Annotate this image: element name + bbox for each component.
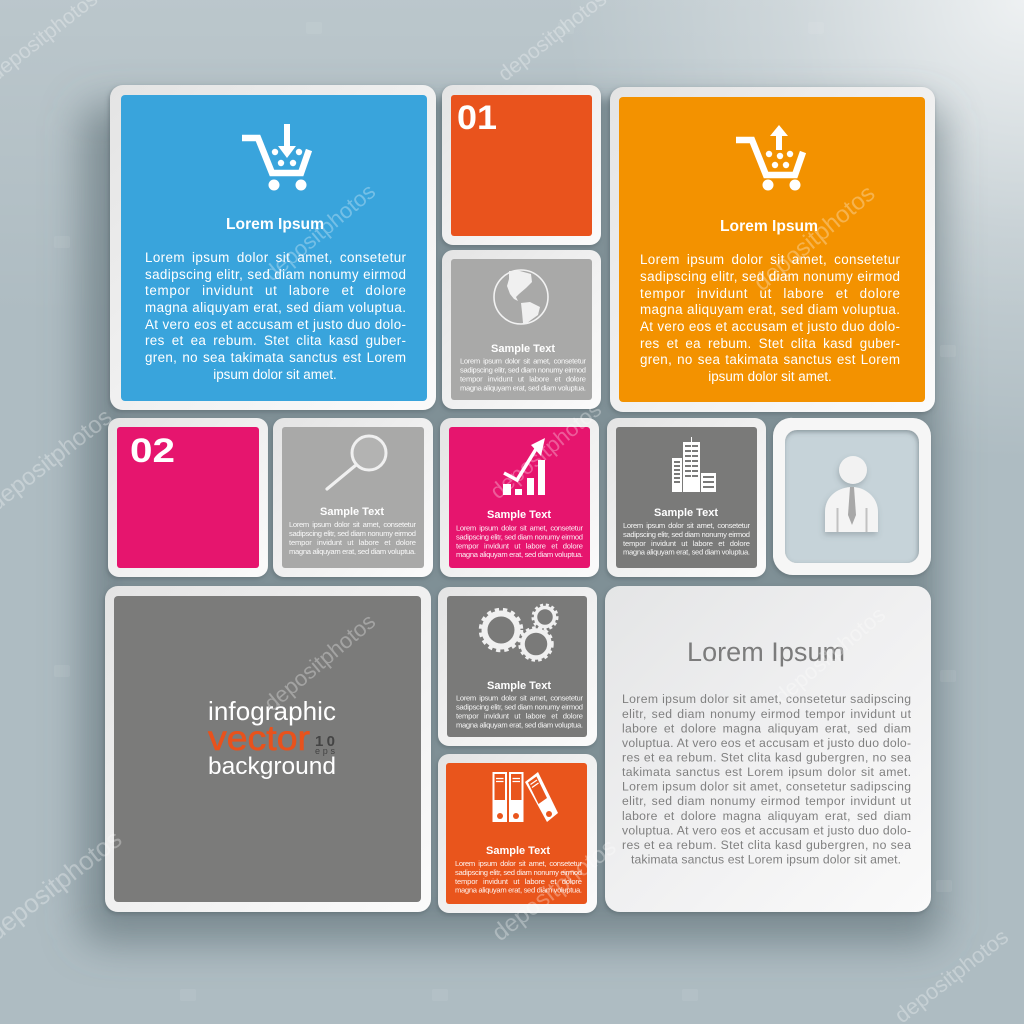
body text: At vero eos et accusam et justo duo dolo- [640, 319, 900, 334]
icon: gears [481, 605, 557, 660]
body text [623, 521, 750, 556]
watermarks: depositphotos [485, 397, 606, 504]
title lockup [208, 696, 336, 780]
icon: binders [492, 772, 558, 822]
body text: sadipscing elitr, sed diam nonumy eirmod [455, 868, 582, 877]
number 01: 01 [457, 99, 497, 137]
title lockup: background [208, 753, 336, 780]
panel: blue cart [110, 85, 436, 410]
body text: labore et dolore magna aliquyam erat, sed diam [622, 809, 911, 823]
body text: labore et dolore magna aliquyam erat, sed diam [622, 722, 911, 736]
panel: 02 [108, 418, 268, 577]
icon: cart with down arrow [242, 124, 309, 190]
panel: white text [605, 586, 931, 912]
panel: 01 [442, 85, 601, 245]
body text: voluptua. At vero eos et accusam et justo duo dolo- [622, 824, 911, 838]
body text: sadipscing elitr, sed diam nonumy eirmod [456, 532, 583, 542]
body text: tempor invidunt ut labore et dolore [289, 538, 416, 547]
body text: sadipscing elitr, sed diam nonumy eirmod [145, 267, 406, 282]
body text [456, 694, 583, 730]
title lockup: eps [315, 746, 336, 756]
body text: Lorem ipsum dolor sit amet, consetetur [640, 252, 901, 267]
body text: voluptua. At vero eos et accusam et justo duo dolo- [622, 736, 911, 750]
body text: tempor invidunt ut labore et dolore [456, 542, 583, 550]
body text: takimata sanctus est Lorem ipsum dolor sit amet. [631, 852, 901, 866]
body text [145, 250, 407, 382]
title lockup: 10 [315, 733, 335, 750]
body text: sadipscing elitr, sed diam nonumy eirmod [640, 269, 900, 284]
title lockup: infographic [208, 696, 336, 726]
body text: Lorem ipsum dolor sit amet, consetetur [456, 524, 583, 532]
body text: sadipscing elitr, sed diam nonumy eirmod [623, 530, 750, 539]
body text: Lorem ipsum dolor sit amet, consetetur [456, 694, 583, 702]
body text: tempor invidunt ut labore et dolore [456, 712, 583, 720]
panel: binders [438, 754, 597, 913]
icon: rising bar chart [503, 438, 545, 495]
body text: ipsum dolor sit amet. [708, 369, 832, 384]
heading: Sample Text [487, 509, 551, 521]
panel: person frame [773, 418, 931, 575]
body text: elitr, sed diam nonumy eirmod tempor invidunt ut [622, 707, 912, 721]
panel: growth chart [440, 418, 599, 577]
body text: magna aliquyam erat, sed diam voluptua. [455, 886, 582, 894]
body text: magna aliquyam erat, sed diam voluptua. [460, 384, 586, 392]
panel: gears [438, 587, 597, 746]
number 02: 02 [130, 432, 175, 470]
heading: Lorem Ipsum [226, 216, 324, 233]
icon: buildings [672, 437, 716, 492]
body text: tempor invidunt ut labore et dolore [460, 374, 586, 384]
body text: magna aliquyam erat, sed diam voluptua. [289, 547, 416, 556]
body text: tempor invidunt ut labore et dolore [145, 283, 406, 298]
body text: magna aliquyam erat, sed diam voluptua. [456, 550, 583, 559]
body text: gren, no sea takimata sanctus est Lorem [640, 352, 900, 367]
body text: takimata sanctus est Lorem ipsum dolor sit amet. [622, 765, 911, 779]
body text [289, 520, 416, 556]
body text: res et ea rebum. Stet clita kasd gubergren, no sea [622, 750, 911, 764]
body text: Lorem ipsum dolor sit amet, consetetur sadipscing [622, 780, 911, 794]
body text [455, 859, 582, 894]
body text: ipsum dolor sit amet. [213, 367, 337, 382]
body text: magna aliquyam erat, sed diam voluptua. [145, 300, 406, 315]
panel: orange cart [610, 87, 935, 412]
panel: buildings [607, 418, 766, 577]
body text: Lorem ipsum dolor sit amet, consetetur [289, 520, 416, 529]
icon: person with tie [825, 456, 878, 532]
body text: res et ea rebum. Stet clita kasd guber- [640, 336, 900, 351]
heading: Sample Text [320, 506, 384, 518]
body text: magna aliquyam erat, sed diam voluptua. [640, 302, 900, 317]
icon: globe [494, 270, 548, 324]
body text: Lorem ipsum dolor sit amet, consetetur [455, 859, 582, 868]
body text [460, 356, 586, 392]
watermarks: depositphotos [487, 833, 621, 947]
body text: tempor invidunt ut labore et dolore [623, 539, 750, 548]
panel: magnifier [273, 418, 433, 577]
body text: sadipscing elitr, sed diam nonumy eirmod [460, 366, 586, 374]
heading: Sample Text [486, 845, 550, 857]
body text: sadipscing elitr, sed diam nonumy eirmod [456, 702, 583, 712]
body text: Lorem ipsum dolor sit amet, consetetur [145, 250, 407, 265]
body text: gren, no sea takimata sanctus est Lorem [145, 350, 406, 365]
heading: Sample Text [491, 343, 555, 355]
icon: magnifier [327, 436, 386, 489]
body text: tempor invidunt ut labore et dolore [455, 877, 582, 886]
body text: magna aliquyam erat, sed diam voluptua. [456, 720, 583, 730]
body text: Lorem ipsum dolor sit amet, consetetur [460, 356, 586, 366]
body text [622, 692, 912, 866]
body text: magna aliquyam erat, sed diam voluptua. [623, 548, 750, 556]
body text: elitr, sed diam nonumy eirmod tempor invidunt ut [622, 794, 912, 808]
body text: res et ea rebum. Stet clita kasd gubergren, no sea [622, 838, 911, 852]
body text: res et ea rebum. Stet clita kasd guber- [145, 333, 406, 348]
body text [456, 524, 583, 559]
body text: tempor invidunt ut labore et dolore [640, 286, 900, 301]
body text: Lorem ipsum dolor sit amet, consetetur sadipscing [622, 692, 911, 706]
body text: sadipscing elitr, sed diam nonumy eirmod [289, 529, 416, 538]
heading: Sample Text [487, 680, 551, 692]
panel: globe [442, 250, 601, 409]
watermarks: depositphotos [259, 179, 380, 286]
heading: Lorem Ipsum [720, 218, 818, 235]
heading: Lorem Ipsum [687, 637, 845, 667]
title lockup: vector [208, 719, 310, 758]
body text: Lorem ipsum dolor sit amet, consetetur [623, 521, 750, 530]
panel: big grey title [105, 586, 431, 912]
watermarks: depositphotos [259, 609, 380, 716]
body text [640, 252, 901, 384]
icon: cart with up arrow [736, 125, 803, 190]
body text: At vero eos et accusam et justo duo dolo- [145, 317, 406, 332]
watermarks: depositphotos [749, 180, 880, 297]
watermarks: depositphotos [769, 602, 890, 709]
heading: Sample Text [654, 507, 718, 519]
